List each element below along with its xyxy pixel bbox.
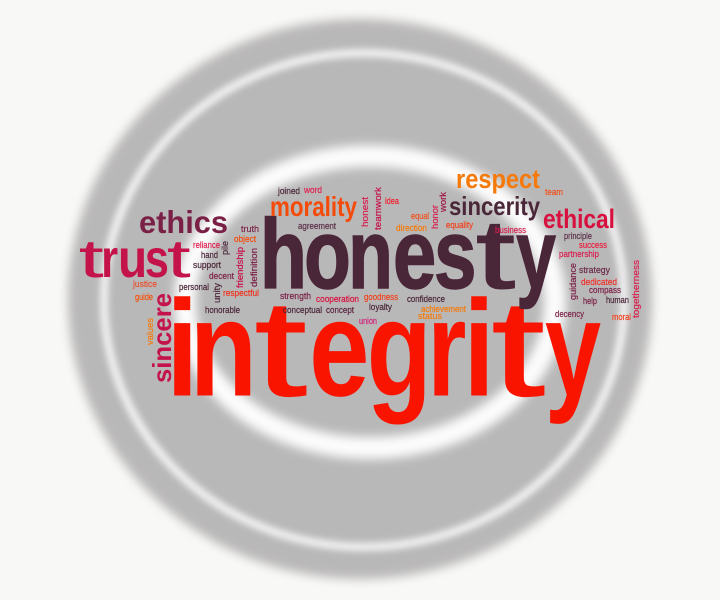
small words: left cluster: guide [135, 292, 153, 303]
small words: left cluster: word [303, 185, 322, 196]
small words: left cluster: honorable [205, 305, 240, 316]
small words: centre cluster: direction [396, 223, 427, 234]
word cloud [79, 164, 642, 426]
small words: right cluster: moral [612, 312, 631, 323]
word: integrity: e [309, 272, 369, 426]
small words: left cluster: values [145, 318, 156, 345]
small words: centre cluster: honest [360, 197, 371, 227]
small words: centre cluster: idea [385, 196, 400, 207]
small words: left cluster: definition [249, 248, 260, 287]
small words: left cluster: reliance [193, 240, 220, 251]
word: honesty: h [260, 199, 307, 309]
small words: centre cluster: conceptual [283, 305, 322, 316]
word: trust: s [145, 229, 169, 289]
small words: left cluster: truth [241, 224, 259, 235]
small words: centre cluster: strength [280, 291, 311, 302]
word: sincere: sincere [147, 293, 177, 383]
small words: centre cluster [280, 187, 466, 327]
word: trust: t [79, 229, 104, 289]
small words: right cluster: principle [564, 231, 592, 242]
small words: centre cluster: equal [411, 211, 429, 222]
small words: left cluster: respectful [223, 288, 259, 299]
word: morality: morality [270, 191, 357, 222]
word: integrity: i [166, 272, 198, 426]
word: ethics: ethics [139, 204, 228, 240]
word: respect: respect [456, 164, 540, 194]
small words: centre cluster: loyalty [369, 302, 392, 313]
word: honesty: o [304, 199, 351, 309]
small words: right cluster: team [545, 187, 563, 198]
small words: left cluster [132, 185, 336, 345]
word: integrity: i [463, 272, 495, 426]
word: sincerity: sincerity [449, 191, 540, 221]
small words: left cluster: personal [179, 282, 209, 293]
small words: centre cluster: honor [430, 205, 441, 229]
small words: right cluster: togetherness [631, 260, 642, 318]
small words: centre cluster: union [359, 316, 377, 327]
small words: left cluster: unity [212, 283, 223, 303]
small words: right cluster: compass [589, 285, 621, 296]
word: honesty: t [476, 199, 515, 309]
small words: left cluster: friendship [235, 247, 246, 288]
word: trust: u [118, 229, 147, 289]
word: ethical: ethical [543, 204, 615, 234]
small words: left cluster: hand [201, 250, 218, 261]
small words: left cluster: justice [132, 279, 157, 290]
word: integrity: g [367, 272, 432, 426]
small words: centre cluster: achievement [421, 304, 466, 315]
small words: centre cluster: teamwork [373, 187, 384, 230]
small words: left cluster: support [193, 260, 221, 271]
word: honesty: n [348, 199, 393, 309]
small words: right cluster: partnership [559, 249, 599, 260]
small words: right cluster: equality [446, 220, 473, 231]
small words: right cluster: help [583, 296, 597, 307]
small words: left cluster: decent [209, 271, 234, 282]
small words: centre cluster: confidence [407, 294, 445, 305]
small words: left cluster: pile [220, 241, 231, 255]
word: integrity: r [427, 272, 466, 426]
word: integrity: n [190, 272, 257, 426]
word: integrity: t [254, 272, 307, 426]
small words: right cluster: decency [555, 309, 584, 320]
small words: right cluster: business [495, 225, 526, 236]
small words: right cluster: human [606, 295, 629, 306]
small words: right cluster [446, 187, 642, 323]
small words: right cluster: success [579, 240, 607, 251]
small words: left cluster: joined [277, 186, 300, 197]
small words: centre cluster: work [438, 192, 449, 213]
word: trust: t [167, 229, 191, 289]
small words: right cluster: strategy [579, 265, 610, 276]
small words: right cluster: guidance [568, 263, 579, 300]
small words: centre cluster: cooperation [316, 294, 359, 305]
small words: left cluster: object [234, 234, 256, 245]
word: integrity: t [491, 272, 545, 426]
background: concentric blurred rings [68, 19, 652, 579]
small words: right cluster: dedicated [581, 277, 617, 288]
word: honesty: e [393, 199, 436, 309]
small words: centre cluster: goodness [364, 292, 398, 303]
word: integrity: y [545, 272, 601, 426]
word: honesty: s [434, 199, 476, 309]
word: trust: r [101, 229, 118, 289]
small words: centre cluster: status [418, 311, 442, 322]
small words: left cluster: agreement [298, 221, 336, 232]
word: honesty: y [516, 199, 556, 309]
small words: centre cluster: concept [326, 305, 354, 316]
